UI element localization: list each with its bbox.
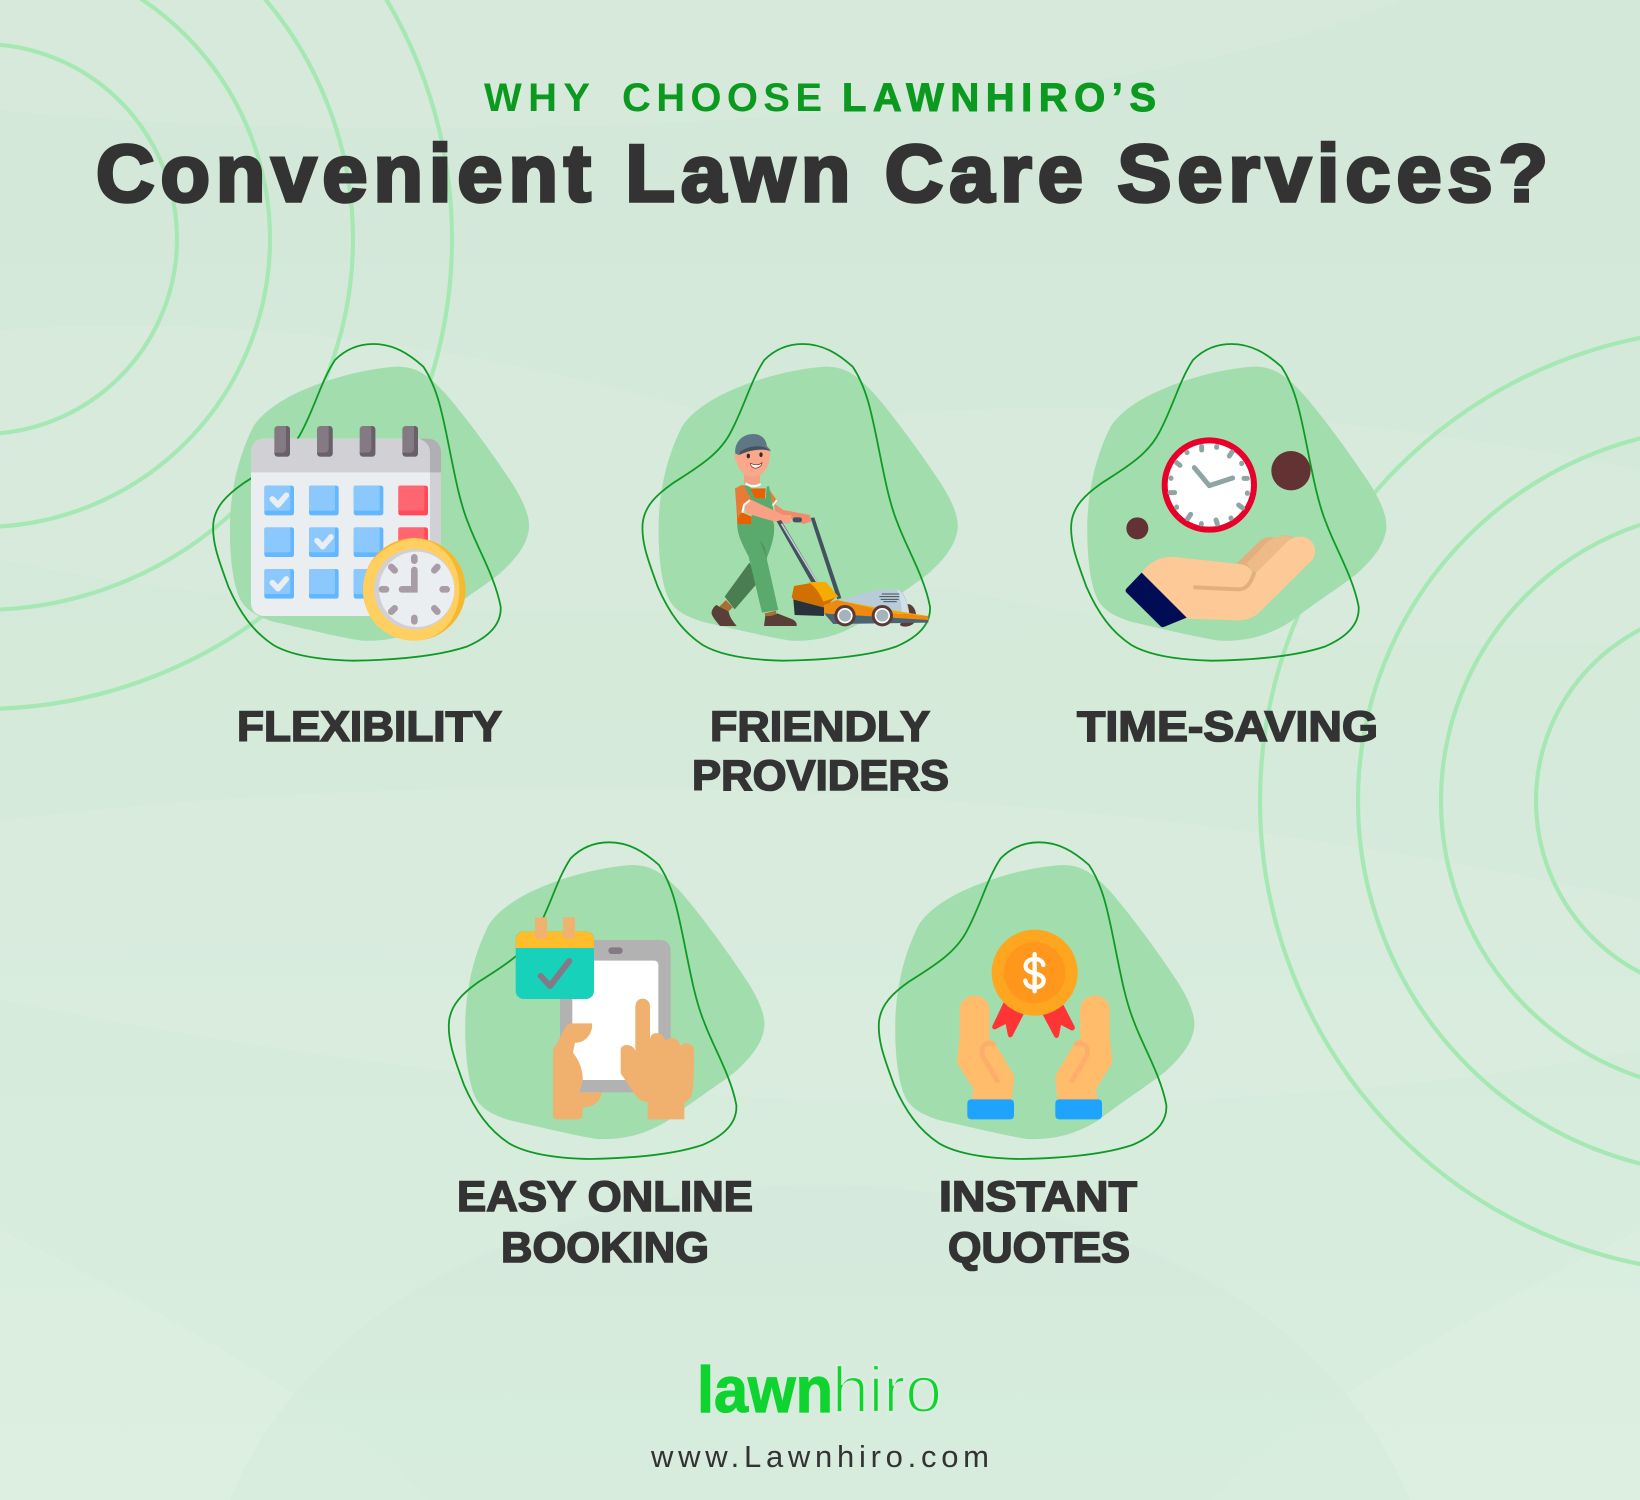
blob and icon: clock over open hand [1071,344,1386,661]
panel: easy online booking [449,842,764,1272]
label: FLEXIBILITY [237,703,502,751]
logo: lawnhiro: hiro [832,1353,942,1426]
blob and icon: calendar with clock [213,344,529,661]
label: INSTANT [939,1173,1137,1221]
panel: flexibility [213,344,529,751]
label: PROVIDERS [692,752,949,800]
eyebrow heading: CHOOSE [622,76,822,120]
label: QUOTES [948,1224,1130,1272]
logo: lawnhiro: lawn [697,1353,833,1426]
logo: lawnhiro [697,1353,942,1426]
panel: instant quotes [879,842,1194,1272]
decorative rings: top left [0,0,452,709]
label: TIME-SAVING [1077,703,1378,751]
decorative rings: right [1260,329,1640,1273]
blob and icon: man with lawn mower [642,344,958,661]
label [457,1173,753,1272]
blob and icon: hands with dollar medal [879,842,1194,1159]
eyebrow heading [484,76,1156,120]
label [692,703,949,800]
blob and icon: phone with booking calendar [449,842,764,1159]
eyebrow heading: WHY [484,76,590,120]
label [939,1173,1137,1272]
panel: time-saving [1071,344,1386,751]
label: FRIENDLY [710,703,930,751]
label: BOOKING [501,1224,709,1272]
label: EASY ONLINE [457,1173,753,1221]
panel: friendly providers [642,344,958,800]
website url: www.Lawnhiro.com [650,1439,989,1474]
title: Convenient Lawn Care Services? [96,129,1548,219]
eyebrow heading: LAWNHIRO’S [842,76,1156,120]
